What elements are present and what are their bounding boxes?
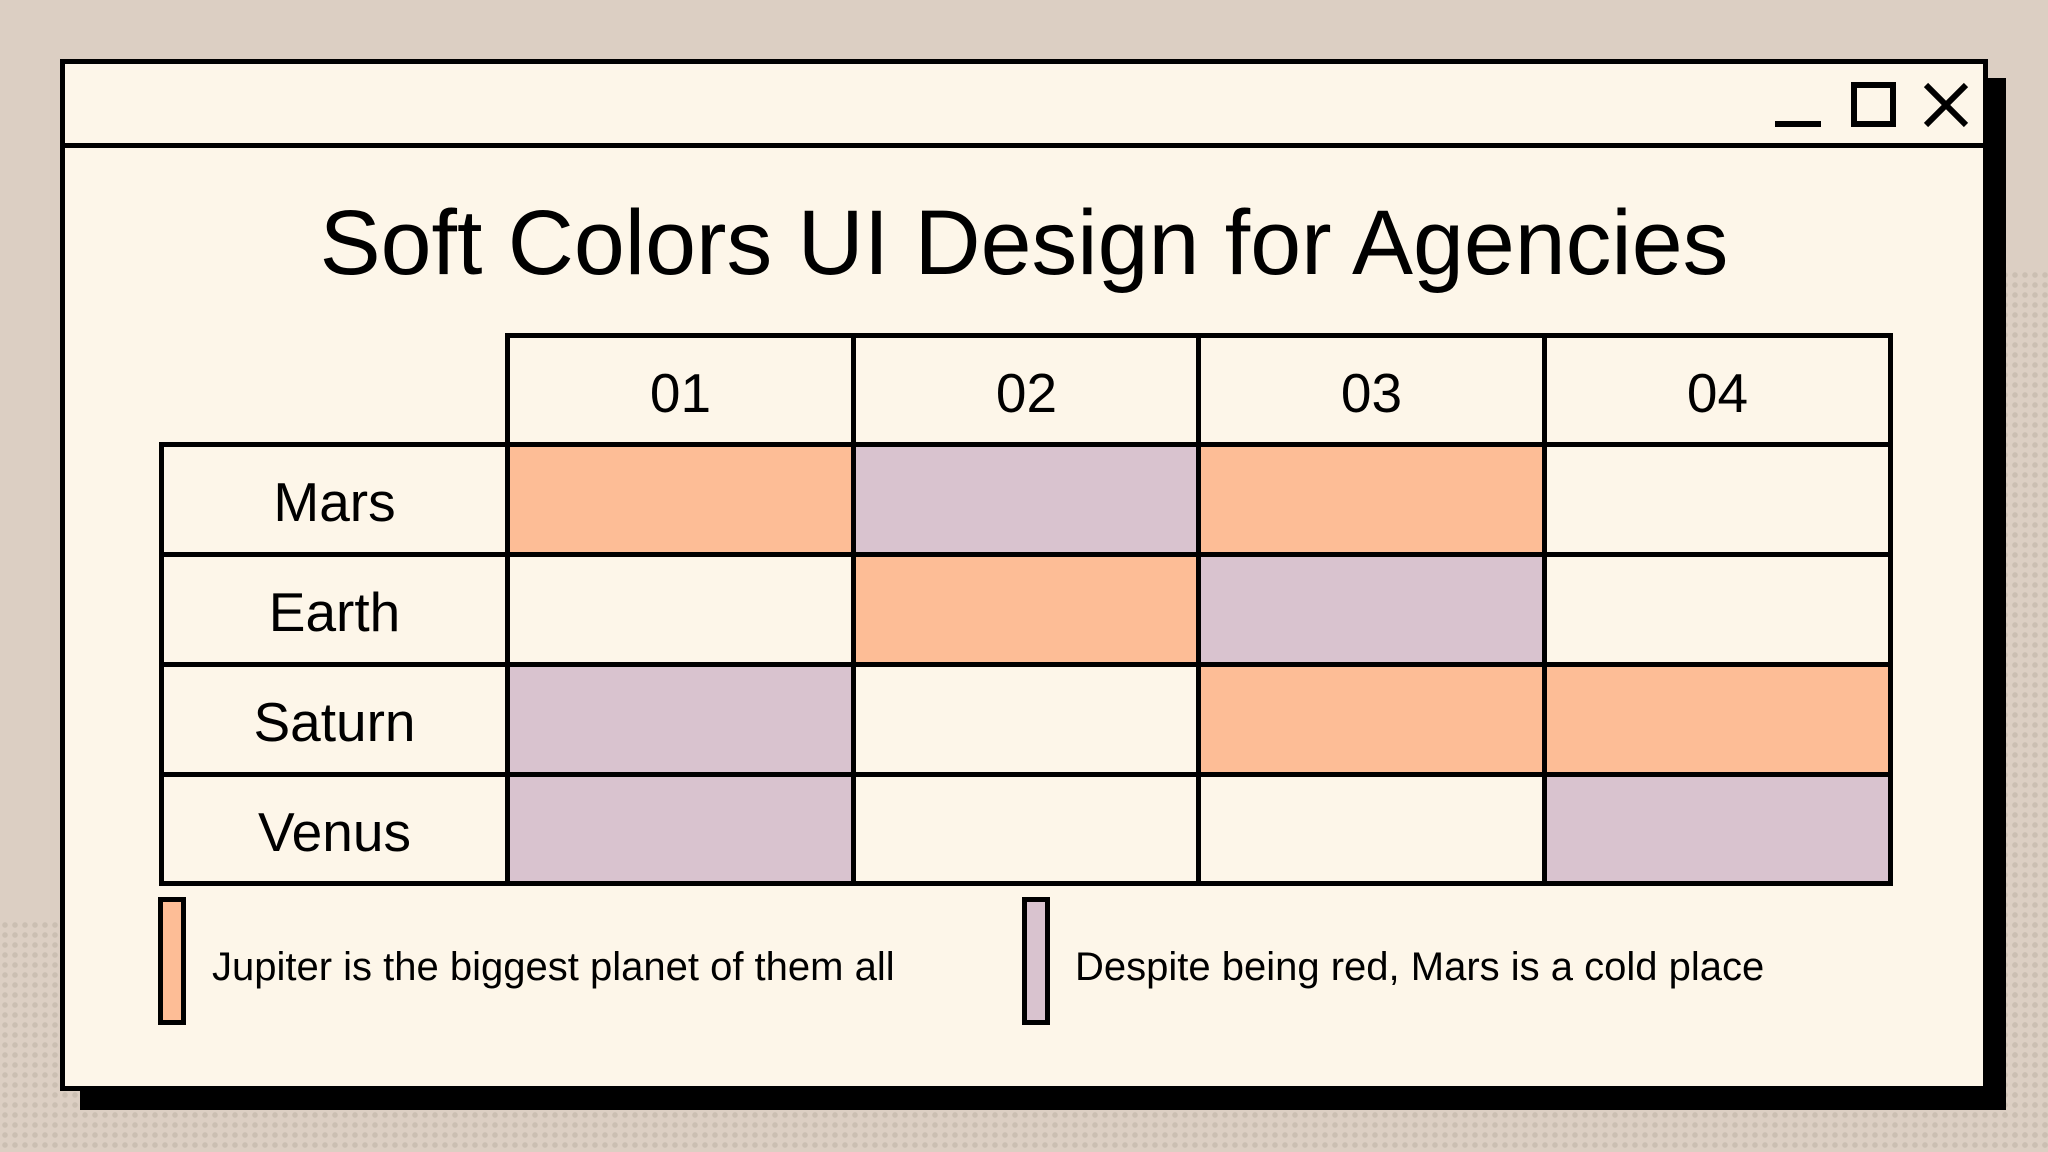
legend text purple: Despite being red, Mars is a cold place [1075,945,1764,989]
table: 04 [1687,362,1748,424]
swatch purple [1022,897,1050,1025]
column headers: 01 [650,362,711,424]
swatch orange [158,897,186,1025]
row: Earth: Earth [269,581,400,643]
row: Mars [159,442,510,557]
row: Venus: Venus [258,800,411,862]
table: 02 [996,362,1057,424]
row: Venus [159,772,510,886]
row: Mars: Mars [273,471,396,533]
column headers [505,333,856,447]
title: Soft Colors UI Design for Agencies [320,192,1728,294]
title bar [65,64,1983,148]
legend: orange [158,897,895,1025]
legend text orange: Jupiter is the biggest planet of them all [212,945,895,989]
row: Saturn [159,662,510,777]
icon: maximize [1851,82,1896,127]
row: Saturn: Saturn [253,691,416,753]
icon: close [1924,82,1968,128]
table: 03 [1341,362,1402,424]
icon: minimize [1775,121,1821,127]
row: Earth [159,552,510,667]
table [159,333,1893,886]
legend: purple [1022,897,1764,1025]
